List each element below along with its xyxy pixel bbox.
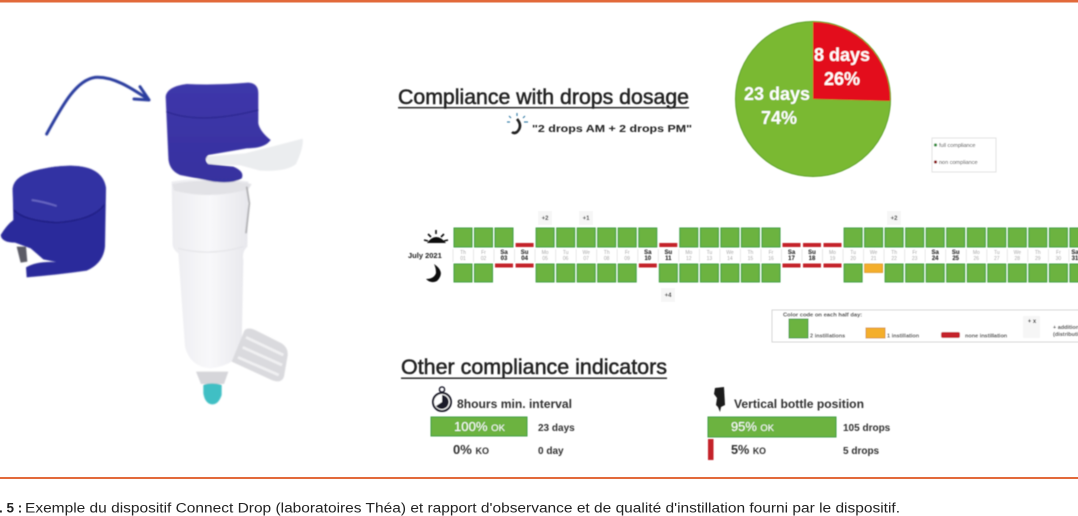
date cells: Mo — [829, 250, 836, 256]
date cells: Sa — [788, 250, 795, 256]
indicator: interval: 0 day — [538, 446, 564, 457]
evening row — [454, 264, 1078, 282]
dosage text: "2 drops AM + 2 drops PM" — [532, 124, 692, 135]
caption: Exemple du dispositif Connect Drop (laboratoires Théa) et rapport d'observance et de qualité d'instillation fourni par le dispositif. — [25, 500, 900, 516]
date cells: 25 — [952, 256, 960, 262]
arrow — [47, 77, 149, 134]
indicator: interval: 0% KO — [453, 442, 489, 457]
indicator: bottle position: 5 drops — [843, 446, 880, 457]
heading: compliance: Compliance with drops dosage — [398, 86, 689, 109]
date cells: 12 — [686, 256, 692, 262]
evening missed doses — [495, 264, 842, 268]
date cells: 15 — [748, 256, 753, 262]
pie chart: 26% — [824, 69, 860, 89]
indicator: interval — [431, 387, 575, 457]
pie legend: full compliance — [939, 143, 975, 149]
date cells: 29 — [1035, 256, 1041, 262]
date cells: Tu — [563, 250, 569, 256]
date cells: Th — [604, 250, 610, 256]
date cells: Mo — [542, 250, 549, 256]
date cells: 22 — [891, 256, 897, 262]
date cells: 01 — [460, 256, 466, 262]
indicator: bottle position — [708, 387, 891, 460]
date cells: 09 — [624, 256, 630, 262]
date cells: Su — [521, 250, 528, 256]
calendar labels — [408, 230, 448, 282]
indicator: bottle position: 95% OK — [731, 419, 775, 434]
date cells: 16 — [768, 256, 774, 262]
indicator: interval: 8hours min. interval — [457, 397, 572, 411]
date cells: Th — [1035, 250, 1041, 256]
date cells: Su — [952, 250, 960, 256]
mounted blue cap — [166, 83, 271, 182]
extra drop markers: +4 — [665, 293, 672, 299]
date cells: We — [582, 250, 590, 256]
date cells: 28 — [1015, 256, 1020, 262]
icon: moon — [426, 264, 441, 282]
date cells: We — [1014, 250, 1021, 256]
date cells: Tu — [707, 250, 712, 256]
indicator: interval: 23 days — [538, 423, 575, 434]
date cells: Tu — [994, 250, 1000, 256]
date cells: 10 — [644, 256, 652, 262]
date cells: 08 — [604, 256, 610, 262]
morning missed doses — [516, 243, 842, 247]
indicator: bottle position: 105 drops — [843, 423, 891, 434]
pie chart: 8 days — [814, 45, 870, 65]
date cells: 17 — [788, 256, 795, 262]
colour code legend: none instillation — [965, 334, 1008, 340]
date cells: 27 — [994, 256, 1000, 262]
date cells: Sa — [932, 250, 939, 256]
colour code legend: Color code on each half day: — [783, 312, 862, 318]
indicator: bottle position: 5% KO — [731, 442, 766, 457]
detached blue cap — [1, 166, 106, 277]
date cells: Th — [460, 250, 466, 256]
date cells: 05 — [542, 256, 548, 262]
bottom rule — [0, 477, 1078, 479]
pie chart: 23 days — [744, 84, 810, 104]
date cells: 06 — [563, 256, 569, 262]
date cells: Sa — [644, 250, 651, 256]
extra drop markers: +2 — [891, 216, 898, 222]
date cells: 13 — [707, 256, 712, 262]
date cells — [453, 249, 1078, 262]
date cells: Fr — [912, 250, 917, 256]
date cells: 19 — [830, 256, 835, 262]
date cells: 30 — [1056, 256, 1061, 262]
date cells: Sa — [500, 250, 508, 256]
icon: sun — [424, 230, 448, 243]
top rule — [0, 0, 1078, 2]
morning row — [454, 228, 1078, 247]
extra drop markers: +2 — [542, 216, 549, 222]
indicator: interval: 100% OK — [454, 419, 506, 434]
date cells: Mo — [973, 250, 980, 256]
icon: sun and moon — [507, 113, 528, 133]
pie chart — [736, 22, 890, 176]
colour code legend: 1 instillation — [887, 334, 920, 340]
date cells: 07 — [583, 256, 589, 262]
date cells: Th — [747, 250, 753, 256]
colour code legend: 2 instillations — [810, 334, 845, 340]
date cells: Su — [808, 250, 816, 256]
date cells: Tu — [850, 250, 856, 256]
pie legend — [932, 138, 996, 172]
date cells: We — [870, 250, 877, 256]
icon: stopwatch — [433, 387, 451, 411]
date cells: 14 — [727, 256, 733, 262]
date cells: Fr — [481, 250, 486, 256]
pie legend: non compliance — [939, 160, 978, 166]
date cells: 11 — [665, 256, 672, 262]
white thumb flap — [205, 139, 303, 171]
colour code legend: + x — [1028, 319, 1037, 325]
date cells: 26 — [974, 256, 979, 262]
date cells: Fr — [1056, 250, 1061, 256]
date cells: 21 — [871, 256, 877, 262]
extra drop markers: +1 — [583, 216, 590, 222]
date cells: Mo — [685, 250, 692, 256]
extra drop markers — [538, 211, 901, 302]
indicator: bottle position: Vertical bottle position — [734, 397, 864, 411]
date cells: 02 — [481, 256, 486, 262]
date cells: 23 — [912, 256, 918, 262]
month label: July 2021 — [408, 251, 442, 260]
pump body — [172, 178, 288, 404]
date cells: 20 — [850, 256, 856, 262]
device illustration — [1, 77, 303, 404]
date cells: Fr — [769, 250, 773, 256]
date cells: 18 — [809, 256, 816, 262]
date cells: 24 — [932, 256, 939, 262]
evening single instillation — [865, 264, 883, 272]
date cells: Su — [664, 250, 672, 256]
date cells: 03 — [501, 256, 508, 262]
date cells: We — [726, 250, 734, 256]
pie chart: 74% — [761, 108, 797, 128]
date cells: Fr — [625, 250, 630, 256]
colour code legend — [772, 310, 1078, 342]
date cells: 04 — [521, 256, 529, 262]
heading: other indicators: Other compliance indicators — [401, 356, 667, 379]
date cells: Th — [891, 250, 897, 256]
icon: vertical bottle — [714, 387, 725, 412]
